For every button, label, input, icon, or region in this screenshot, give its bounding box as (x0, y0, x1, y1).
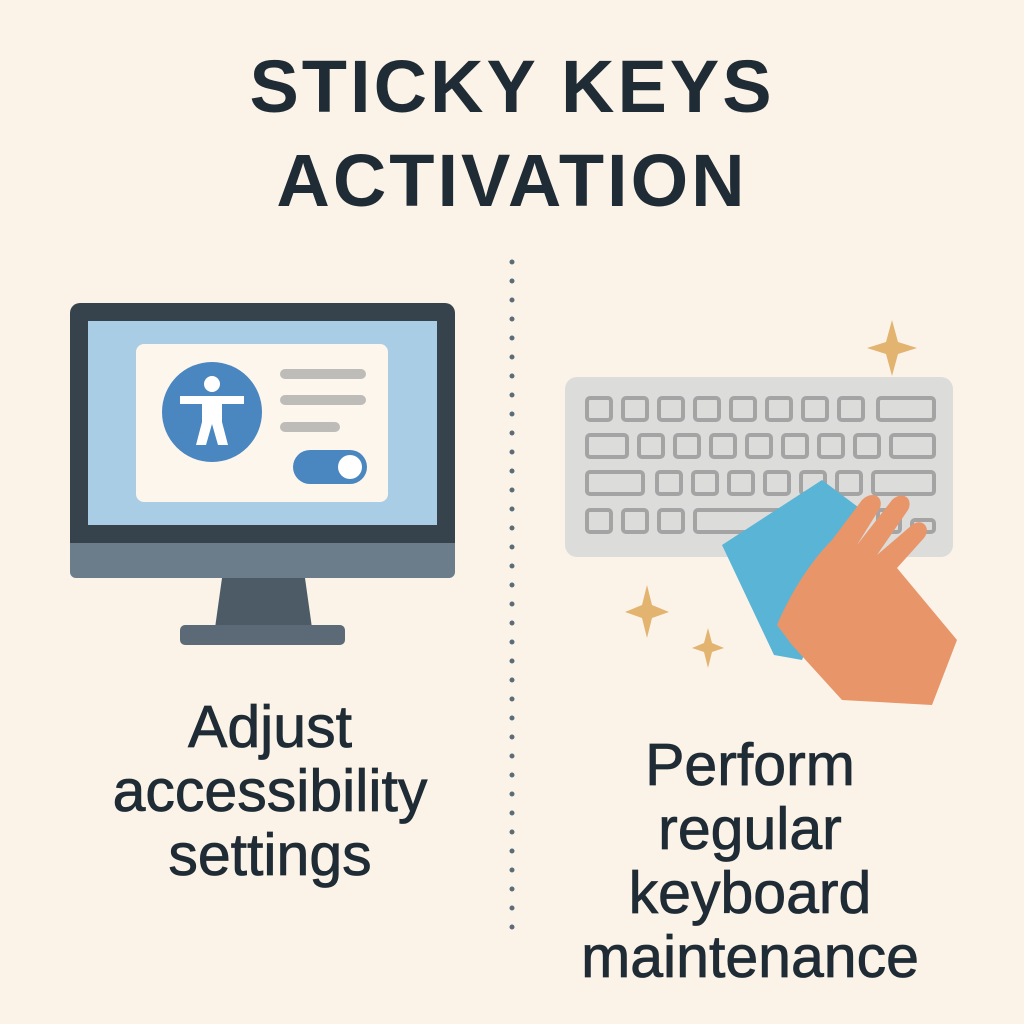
title: ACTIVATION (276, 139, 748, 222)
caption: left: Adjust (188, 694, 352, 760)
caption: right: Perform (645, 732, 855, 798)
caption: left: settings (168, 822, 372, 888)
icon: monitor with accessibility settings (70, 303, 455, 645)
title (249, 45, 775, 222)
caption: left (113, 694, 428, 888)
divider (510, 260, 514, 930)
caption: left: accessibility (113, 758, 427, 824)
icon: keyboard cleaning (565, 320, 957, 705)
caption: right (581, 732, 919, 990)
title: STICKY KEYS (249, 45, 775, 128)
caption: right: keyboard (629, 860, 871, 926)
caption: right: maintenance (581, 924, 919, 990)
caption: right: regular (658, 796, 842, 862)
